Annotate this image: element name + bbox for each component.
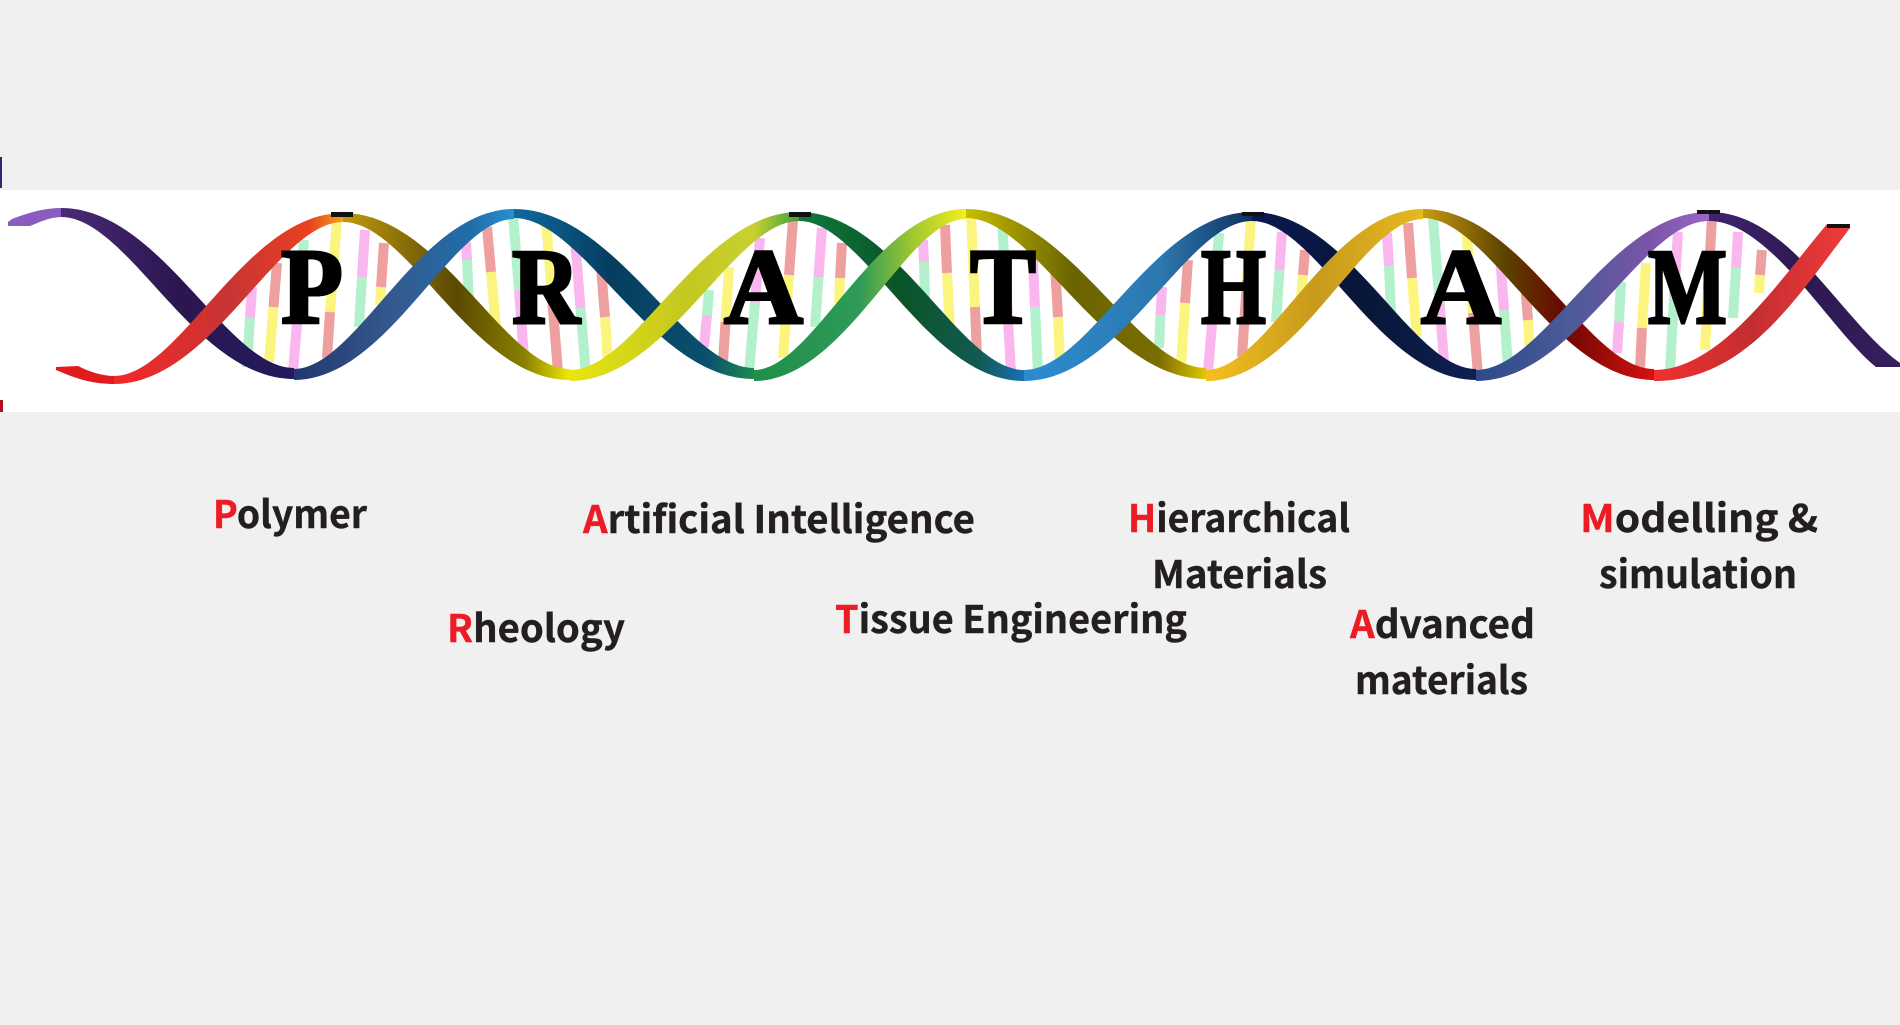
white helix band (0, 190, 1900, 412)
label: Modelling & simulation (1580, 488, 1818, 599)
label: Tissue Engineering: Tissue Engineering (835, 589, 1187, 644)
label: Hierarchical Materials: Hierarchical (1128, 488, 1350, 543)
label: Hierarchical Materials: Materials (1152, 544, 1327, 599)
letter M: M (1648, 228, 1727, 347)
letter P: P (281, 228, 343, 347)
letter A: A (724, 228, 803, 347)
label: Advanced materials (1349, 594, 1535, 705)
helix letters PRATHAM (281, 228, 1727, 347)
label: Polymer: Polymer (213, 484, 367, 539)
label: Advanced materials: Advanced (1349, 594, 1535, 649)
DNA helix (8, 208, 1900, 384)
label: Advanced materials: materials (1355, 650, 1528, 705)
base pair rungs (247, 215, 1762, 375)
falling ribbon segments (8, 208, 1900, 381)
label: Modelling & simulation: simulation (1599, 544, 1797, 599)
label: Artificial Intelligence: Artificial Intelligence (582, 489, 975, 544)
letter R: R (512, 228, 581, 347)
rising ribbon segments (56, 209, 1850, 384)
black ribbon caps (331, 210, 1850, 228)
letter H: H (1201, 228, 1266, 347)
label: Modelling & simulation: Modelling & (1580, 488, 1818, 543)
label: Rheology: Rheology (447, 598, 625, 653)
second letter A: A (1421, 228, 1501, 347)
label: Hierarchical Materials (1128, 488, 1350, 599)
letter T: T (970, 228, 1036, 347)
left edge slivers (0, 157, 3, 412)
